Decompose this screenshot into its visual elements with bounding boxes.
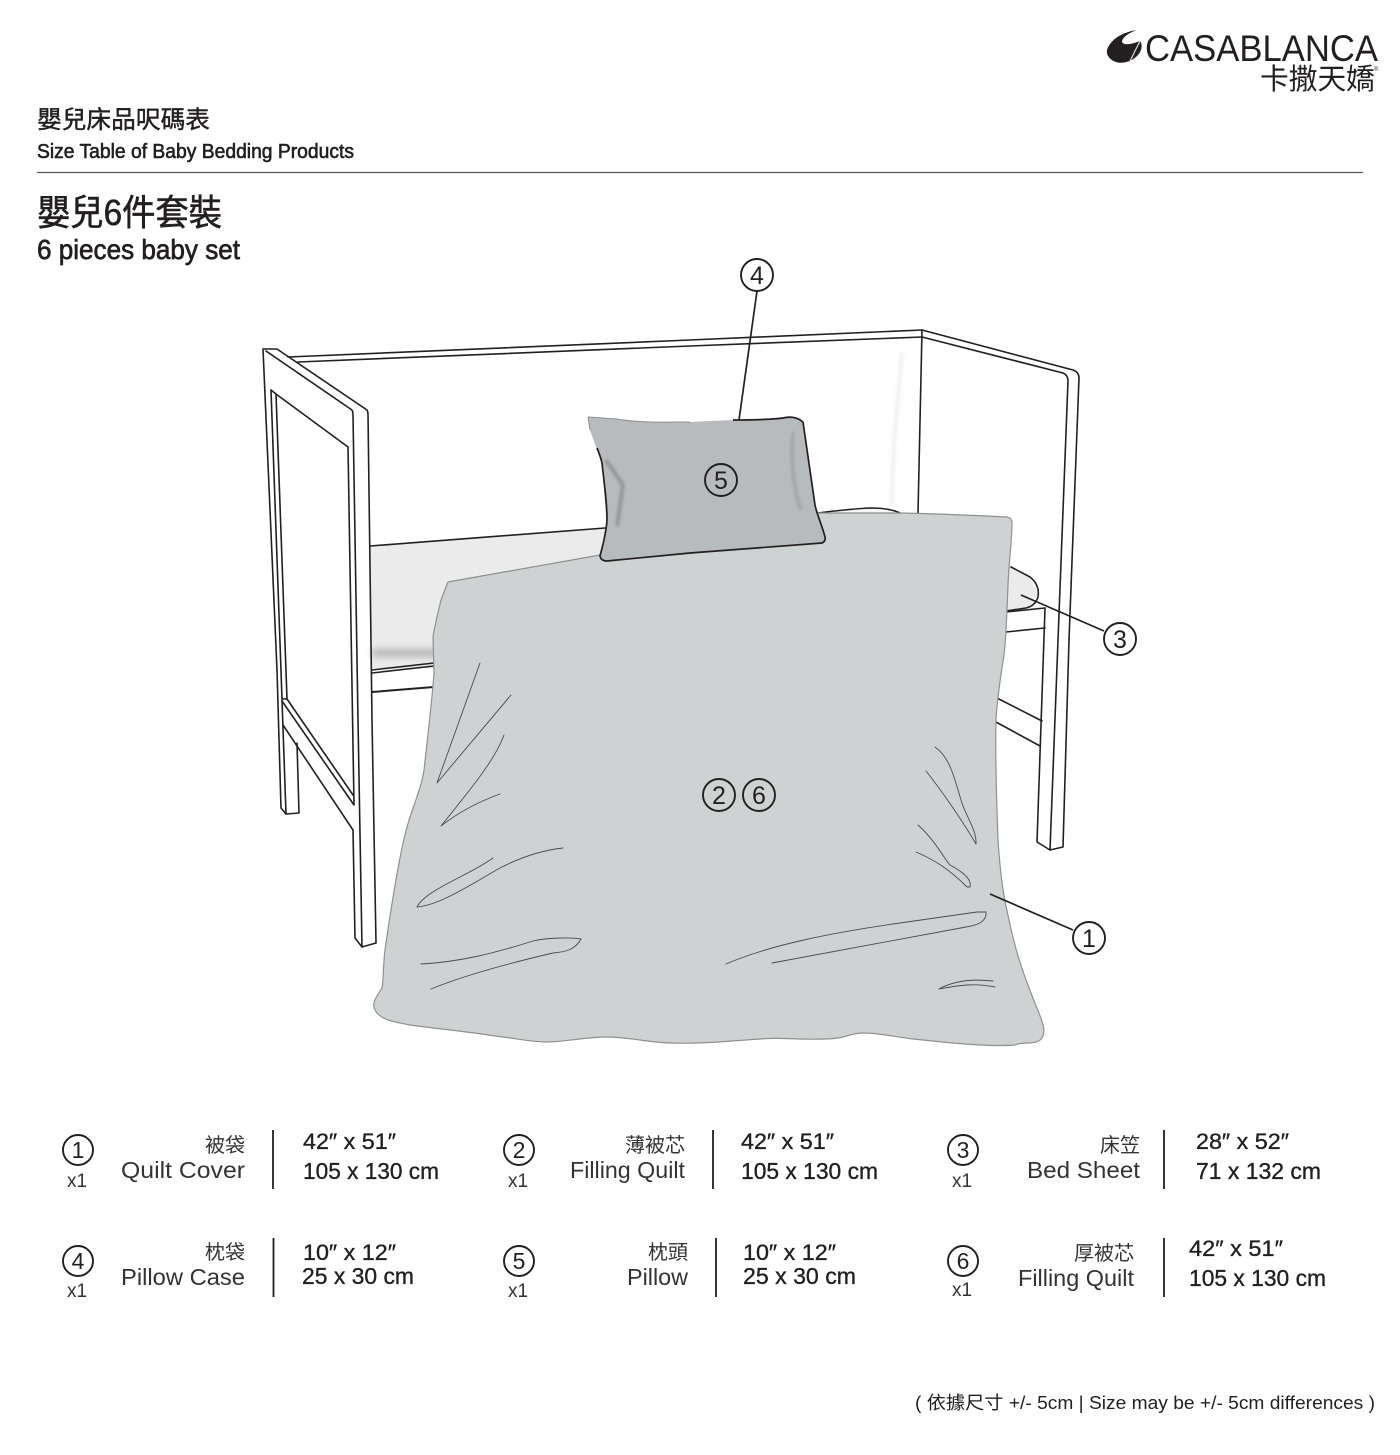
bed sheet	[370, 508, 1038, 669]
item 1: quilt cover: 42″ x 51″	[303, 1129, 396, 1154]
heading: 6 pieces baby set: 嬰兒6件套裝	[37, 192, 222, 233]
item 5: pillow: 5	[513, 1248, 525, 1274]
marker 6: 6	[752, 782, 766, 810]
item 2: filling quilt: x1	[508, 1171, 528, 1192]
item 6: filling quilt: x1	[952, 1280, 972, 1301]
item 4: pillow case: 10″ x 12″	[303, 1240, 396, 1265]
item 3: bed sheet: 71 x 132 cm	[1196, 1158, 1321, 1184]
item 5: pillow: 25 x 30 cm	[743, 1263, 856, 1289]
item 1: quilt cover: x1	[67, 1171, 87, 1192]
item 4: pillow case: Pillow Case	[121, 1264, 245, 1290]
logo: Casablanca: CASABLANCA	[1145, 28, 1378, 69]
crib left panel	[263, 349, 434, 947]
item 5: pillow: 10″ x 12″	[743, 1240, 836, 1265]
item 2: filling quilt	[504, 1129, 878, 1192]
quilt	[374, 513, 1044, 1046]
marker 6	[743, 779, 775, 811]
item 6: filling quilt: 105 x 130 cm	[1189, 1265, 1326, 1291]
item 5: pillow: Pillow	[627, 1264, 688, 1290]
heading: size table	[37, 106, 354, 163]
logo: Casablanca: 卡撒天嬌	[1260, 63, 1375, 96]
heading: 6 pieces baby set	[37, 192, 240, 265]
item 2: filling quilt: 42″ x 51″	[741, 1129, 834, 1154]
item 6: filling quilt: 42″ x 51″	[1189, 1236, 1283, 1261]
item 3: bed sheet: 床笠	[1100, 1134, 1140, 1157]
marker 3	[1104, 623, 1136, 655]
logo: Casablanca	[1107, 28, 1379, 96]
marker 5: 5	[714, 467, 728, 495]
item 3: bed sheet: 3	[957, 1137, 969, 1163]
heading: 6 pieces baby set: 6 pieces baby set	[37, 234, 240, 265]
marker 4	[741, 259, 773, 291]
item 3: bed sheet: 28″ x 52″	[1196, 1129, 1289, 1154]
item 5: pillow	[504, 1238, 856, 1302]
marker 1: 1	[1082, 925, 1096, 953]
item 3: bed sheet: x1	[952, 1171, 972, 1192]
item 5: pillow: 枕頭	[648, 1241, 688, 1264]
item 1: quilt cover: 被袋	[205, 1134, 245, 1157]
item 2: filling quilt: 薄被芯	[625, 1134, 685, 1157]
item 2: filling quilt: 2	[513, 1137, 525, 1163]
leader line: 1 to quilt cover	[990, 894, 1073, 930]
marker 2	[703, 779, 735, 811]
leader line: 4 to pillow case	[739, 291, 757, 420]
crib back and right panels	[288, 330, 1079, 850]
marker 5	[705, 464, 737, 496]
item 4: pillow case: 4	[72, 1248, 85, 1274]
item 1: quilt cover: Quilt Cover	[121, 1157, 245, 1183]
marker 4: 4	[750, 262, 764, 290]
item 6: filling quilt: 厚被芯	[1074, 1242, 1134, 1265]
item 4: pillow case: 25 x 30 cm	[302, 1263, 414, 1289]
leader line: 3 to bed sheet	[1021, 595, 1104, 631]
heading: size table: Size Table of Baby Bedding Products	[37, 141, 354, 163]
item 3: bed sheet: Bed Sheet	[1027, 1157, 1141, 1183]
item 4: pillow case: x1	[67, 1281, 87, 1302]
item 1: quilt cover: 1	[72, 1137, 84, 1163]
marker 1	[1073, 922, 1105, 954]
marker 3: 3	[1113, 626, 1127, 654]
heading: size table: 嬰兒床品呎碼表	[37, 106, 210, 134]
item 5: pillow: x1	[508, 1281, 528, 1302]
item 1: quilt cover: 105 x 130 cm	[303, 1158, 439, 1184]
item 6: filling quilt	[948, 1236, 1326, 1301]
footnote: size tolerance: ( 依據尺寸 +/- 5cm | Size may be +/- 5cm differences )	[915, 1393, 1375, 1413]
item 2: filling quilt: Filling Quilt	[570, 1157, 686, 1183]
item 6: filling quilt: 6	[957, 1248, 969, 1274]
item 3: bed sheet	[948, 1129, 1321, 1192]
item 4: pillow case: 枕袋	[205, 1241, 245, 1264]
pillow	[588, 417, 825, 561]
item 1: quilt cover	[63, 1129, 439, 1192]
item 6: filling quilt: Filling Quilt	[1018, 1265, 1135, 1291]
logo: Casablanca: ®	[1374, 66, 1379, 73]
illustration: baby crib with bedding	[263, 259, 1136, 1046]
item 4: pillow case	[63, 1238, 414, 1302]
item 2: filling quilt: 105 x 130 cm	[741, 1158, 878, 1184]
marker 2: 2	[712, 782, 726, 810]
smudge on back panel	[892, 352, 902, 505]
